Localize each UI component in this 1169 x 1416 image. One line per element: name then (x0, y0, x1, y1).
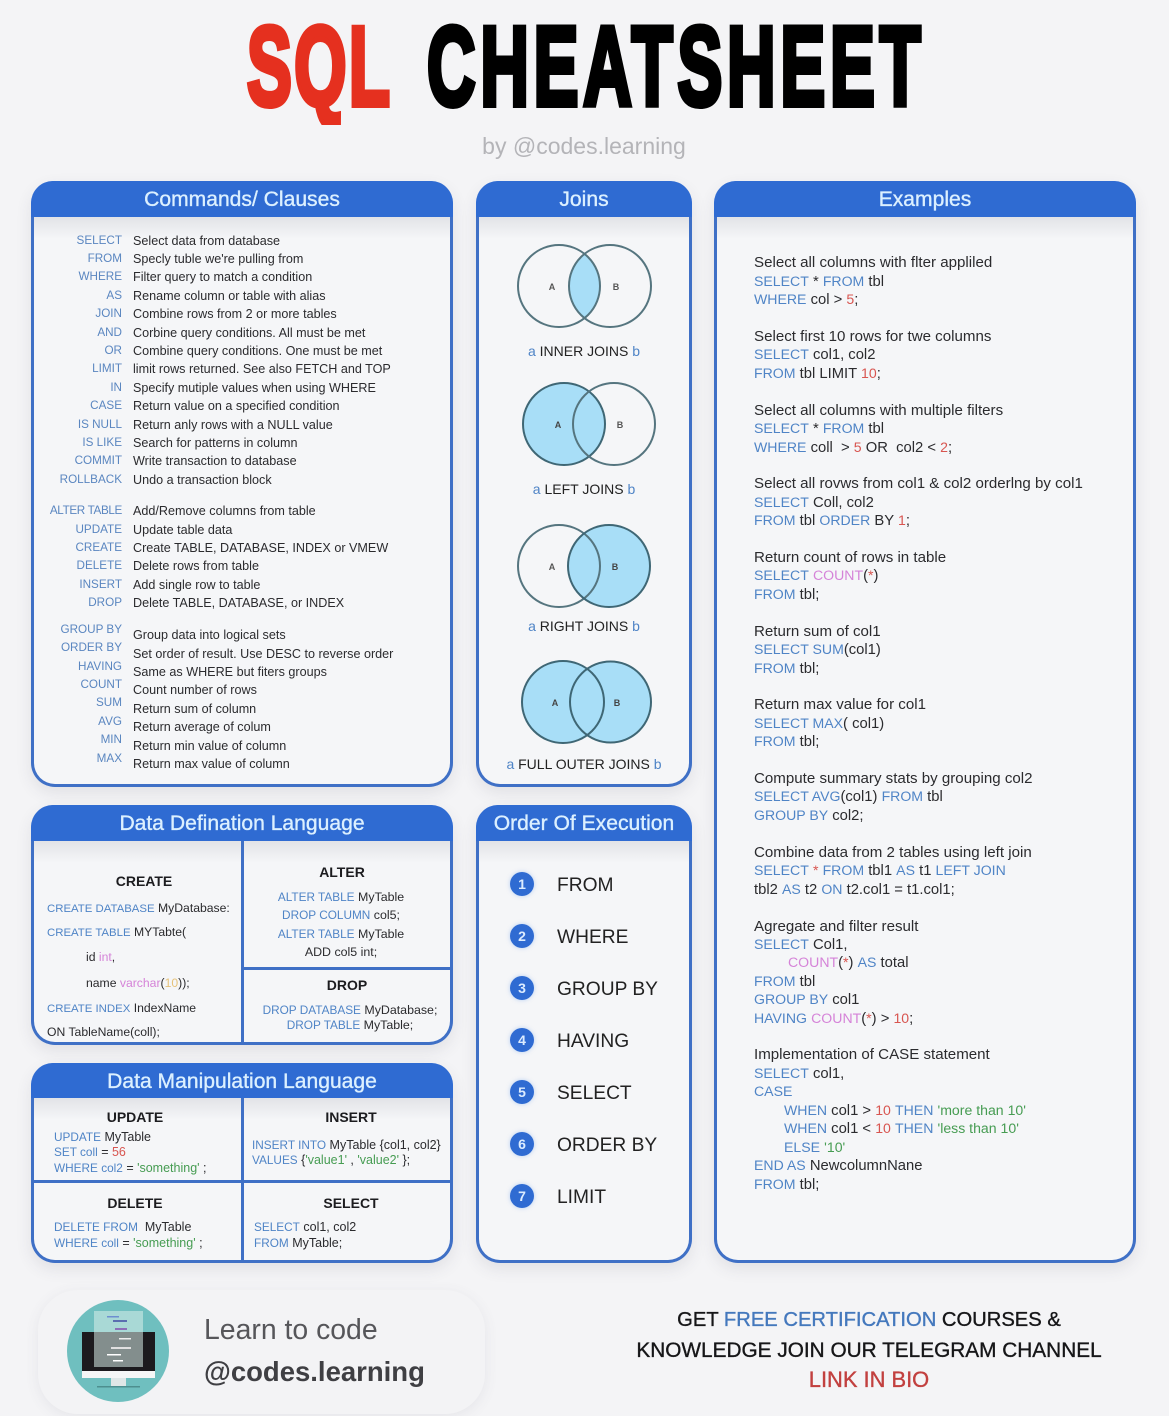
step 6 (508, 1130, 657, 1158)
text block: command list: Rename column or table with alias (133, 289, 326, 303)
text block: command list: IN (110, 381, 122, 394)
heading: joins: Joins (559, 188, 609, 211)
text block: drop statements (263, 1003, 437, 1032)
text block: command list: Combine rows from 2 or more tables (133, 307, 337, 321)
heading: joins (476, 181, 692, 217)
text block: command list: Add/Remove columns from table (133, 504, 316, 518)
step 4 (508, 1026, 629, 1054)
venn: full outer join (521, 660, 652, 744)
text block: command list: IS NULL (78, 418, 122, 430)
text block: command list: Combine query conditions. One must be met (133, 344, 382, 358)
text block: command list: Delete TABLE, DATABASE, or INDEX (133, 596, 344, 610)
text block: delete statement: DELETE FROM MyTable (54, 1220, 191, 1234)
text block: create statements: CREATE TABLE MYTabte( (47, 925, 186, 939)
text block: command list: DROP (88, 596, 122, 609)
text block: query examples: SELECT * FROM tbl (754, 273, 884, 290)
call to action: KNOWLEDGE JOIN OUR TELEGRAM CHANNEL (636, 1338, 1102, 1362)
step 7 (508, 1182, 606, 1210)
text block: alter statements: ADD col5 int; (305, 945, 377, 959)
text block: update statement: WHERE col2 = 'something' ; (54, 1161, 206, 1175)
text block: command list: ALTER TABLE (50, 504, 122, 517)
text block: command list: Return average of colum (133, 720, 271, 734)
text block: query examples: GROUP BY col2; (754, 807, 864, 824)
venn: full outer join: A (552, 698, 559, 708)
step 5: 5 (518, 1084, 526, 1100)
heading: data manipulation language (31, 1063, 453, 1098)
step 1 (508, 870, 614, 898)
heading: insert: INSERT (325, 1109, 377, 1125)
text block: command list: Return max value of column (133, 757, 290, 771)
heading: create: CREATE (116, 873, 172, 889)
text block: command list: AS (106, 289, 122, 302)
text block: query examples: tbl2 AS t2 ON t2.col1 = t1.col1; (754, 881, 955, 898)
step 5: SELECT (557, 1083, 632, 1104)
text block: command list: Create TABLE, DATABASE, INDEX or VMEW (133, 541, 388, 555)
text block: command list: SUM (96, 696, 122, 709)
heading: data manipulation language: Data Manipulation Language (107, 1070, 377, 1093)
text block: command list: ORDER BY (61, 641, 122, 654)
venn: right join: B (612, 562, 619, 572)
text block: query examples: FROM tbl; (754, 733, 819, 750)
text block: select statement (254, 1220, 356, 1250)
text block: query examples: FROM tbl LIMIT 10; (754, 365, 881, 382)
byline: by @codes.learning (482, 133, 686, 159)
text block: query examples: END AS NewcolumnNane (754, 1157, 922, 1174)
step 6: 6 (518, 1136, 526, 1152)
text block: command list: SELECT (77, 234, 122, 246)
text block: create statements: ON TableName(coll); (47, 1025, 160, 1039)
text block: command list (50, 234, 394, 771)
text block: query examples: SELECT AVG(col1) FROM tbl (754, 788, 943, 805)
text block: command list: LIMIT (92, 362, 122, 375)
label: left join: a LEFT JOINS b (533, 481, 635, 497)
text block: query examples: SELECT * FROM tbl1 AS t1 LEFT JOIN (754, 862, 1006, 879)
heading: delete: DELETE (107, 1195, 163, 1211)
text block: insert statement: INSERT INTO MyTable {col1, col2} (252, 1138, 441, 1152)
text block: select statement: FROM MyTable; (254, 1236, 342, 1250)
text block: query examples: SELECT Col1, (754, 936, 847, 953)
text block: query examples: SELECT Coll, col2 (754, 494, 874, 511)
text block: command list: ROLLBACK (60, 473, 122, 486)
text block: query examples: FROM tbl ORDER BY 1; (754, 512, 910, 529)
text block: command list: MIN (101, 733, 122, 746)
text block: query examples: Select first 10 rows for twe columns (754, 328, 991, 345)
text block: command list: WHERE (78, 270, 122, 283)
text block: command list: Write transaction to database (133, 454, 297, 468)
text block: command list: Update table data (133, 522, 232, 536)
text: learn to code: Learn to code (204, 1314, 378, 1346)
text block: command list: CREATE (75, 541, 122, 554)
text block: query examples: SELECT col1, (754, 1065, 844, 1082)
step 7: LIMIT (557, 1187, 606, 1208)
text block: alter statements: ALTER TABLE MyTable (278, 927, 404, 941)
text block: query examples: GROUP BY col1 (754, 991, 859, 1008)
step 7: 7 (518, 1188, 526, 1204)
text: handle: @codes.learning (204, 1356, 425, 1387)
text block: command list: AND (97, 326, 122, 338)
step 3: GROUP BY (557, 979, 658, 1000)
text block: command list: OR (104, 344, 122, 357)
text block: command list: Select data from database (133, 234, 280, 248)
text block: query examples: WHEN col1 < 10 THEN 'less than 10' (784, 1120, 1019, 1137)
text block: command list: Specly tuble we're pulling from (133, 252, 303, 266)
text block: delete statement: WHERE coll = 'something' ; (54, 1236, 203, 1250)
panel: joins (476, 181, 692, 787)
text block: query examples: Select all rovws from col1 & col2 orderlng by col1 (754, 475, 1083, 492)
heading: data defination language (31, 805, 453, 841)
text block: query examples: Implementation of CASE statement (754, 1046, 990, 1063)
call to action (636, 1309, 1102, 1392)
text block: query examples: FROM tbl (754, 973, 815, 990)
text block: drop statements: DROP TABLE MyTable; (287, 1018, 413, 1032)
step 4: HAVING (557, 1031, 629, 1052)
text block: select statement: SELECT col1, col2 (254, 1220, 356, 1234)
heading: data defination language: Data Defination Language (119, 812, 365, 835)
text block: insert statement (252, 1138, 441, 1167)
venn: left join: A (555, 420, 562, 430)
call to action: GET FREE CERTIFICATION COURSES & (677, 1309, 1061, 1331)
text block: command list: Specify mutiple values when using WHERE (133, 381, 376, 395)
text block: query examples: COUNT(*) AS total (788, 954, 908, 971)
text block: command list: limit rows returned. See also FETCH and TOP (133, 362, 391, 376)
text block: command list: INSERT (79, 578, 122, 591)
text block: query examples: ELSE '10' (784, 1139, 845, 1155)
heading: examples: Examples (879, 188, 971, 211)
text block: command list: Set order of result. Use DESC to reverse order (133, 646, 393, 660)
label: inner join: a INNER JOINS b (528, 343, 640, 359)
text block: query examples: FROM tbl; (754, 1176, 819, 1193)
venn: inner join (517, 244, 652, 328)
heading: drop: DROP (327, 977, 367, 993)
heading: commands: Commands/ Clauses (144, 188, 340, 211)
text block: query examples: WHEN col1 > 10 THEN 'more than 10' (784, 1102, 1026, 1119)
text block: query examples: SELECT COUNT(*) (754, 567, 878, 584)
heading: select: SELECT (323, 1195, 379, 1211)
heading: update: UPDATE (107, 1109, 163, 1125)
text block: query examples: Select all columns with multiple filters (754, 402, 1003, 419)
text block: query examples: SELECT SUM(col1) (754, 641, 881, 658)
text block: insert statement: VALUES {'value1' , 'value2' }; (252, 1153, 410, 1167)
text block: command list: FROM (88, 252, 122, 265)
text block: query examples: SELECT col1, col2 (754, 346, 875, 363)
step 2 (508, 922, 628, 950)
text block: alter statements (278, 890, 404, 959)
panel: data definition language (31, 805, 453, 1045)
text block: command list: Group data into logical sets (133, 628, 286, 642)
text block: update statement: UPDATE MyTable (54, 1130, 151, 1144)
text block: command list: COMMIT (75, 454, 122, 467)
text block: command list: MAX (97, 752, 122, 764)
panel: commands and clauses (31, 181, 453, 787)
step 3 (508, 974, 658, 1002)
label: right join: a RIGHT JOINS b (528, 618, 640, 634)
text block: alter statements: DROP COLUMN col5; (282, 908, 400, 922)
text block: query examples: Return count of rows in table (754, 549, 946, 566)
text block: query examples: SELECT MAX( col1) (754, 715, 884, 732)
text block: query examples (754, 254, 1083, 1193)
text block: query examples: Agregate and filter result (754, 918, 918, 935)
text block: create statements: name varchar(10)); (86, 976, 190, 990)
text block: command list: DELETE (77, 559, 122, 572)
venn: left join: B (617, 420, 624, 430)
text block: command list: Add single row to table (133, 578, 260, 592)
text block: query examples: WHERE coll > 5 OR col2 < 2; (754, 439, 952, 456)
text block: query examples: FROM tbl; (754, 660, 819, 677)
venn: full outer join: B (614, 698, 621, 708)
text block: command list: GROUP BY (60, 622, 122, 636)
panel: data manipulation language (31, 1063, 453, 1263)
text block: update statement: SET coll = 56 (54, 1145, 126, 1159)
step 2: 2 (518, 928, 526, 944)
text block: update statement (54, 1130, 206, 1175)
text block: command list: Same as WHERE but fiters groups (133, 665, 327, 679)
venn: inner join: A (549, 282, 556, 292)
text block: query examples: Compute summary stats by grouping col2 (754, 770, 1033, 787)
step 6: ORDER BY (557, 1135, 657, 1156)
text block: alter statements: ALTER TABLE MyTable (278, 890, 404, 904)
text block: create statements: CREATE DATABASE MyDatabase: (47, 901, 230, 915)
step 5 (508, 1078, 632, 1106)
text block: command list: Return min value of column (133, 739, 286, 753)
text block: command list: Return sum of column (133, 702, 256, 716)
text block: command list: IS LIKE (82, 436, 122, 449)
text block: drop statements: DROP DATABASE MyDatabase; (263, 1003, 437, 1017)
venn: right join: A (549, 562, 556, 572)
text block: query examples: Combine data from 2 tables using left join (754, 844, 1032, 861)
heading: alter: ALTER (319, 864, 365, 880)
footer badge (38, 1290, 485, 1414)
panel: order of execution (476, 805, 692, 1263)
text block: query examples: SELECT * FROM tbl (754, 420, 884, 437)
text block: query examples: Return max value for col1 (754, 696, 926, 713)
venn: inner join: B (613, 282, 620, 292)
panel: examples (714, 181, 1136, 1263)
step 1: FROM (557, 875, 614, 896)
venn: right join (517, 524, 651, 608)
venn: left join (522, 382, 656, 466)
text block: command list: Filter query to match a condition (133, 270, 312, 284)
call to action: LINK IN BIO (809, 1367, 929, 1392)
text block: command list: Return anly rows with a NULL value (133, 418, 333, 432)
text block: create statements: id int, (86, 950, 115, 964)
text block: query examples: CASE (754, 1083, 792, 1099)
text block: command list: Corbine query conditions. All must be met (133, 326, 365, 340)
text block: command list: COUNT (80, 678, 122, 691)
text block: query examples: FROM tbl; (754, 586, 819, 603)
step 1: 1 (518, 876, 526, 892)
heading: commands (31, 181, 453, 217)
text block: create statements (47, 901, 230, 1039)
text block: command list: Count number of rows (133, 683, 257, 697)
text block: command list: Return value on a specified condition (133, 399, 340, 413)
text block: create statements: CREATE INDEX IndexName (47, 1001, 196, 1015)
text block: command list: AVG (98, 715, 122, 728)
heading: examples (714, 181, 1136, 217)
text block: query examples: WHERE col > 5; (754, 291, 858, 308)
text block: query examples: HAVING COUNT(*) > 10; (754, 1010, 913, 1027)
text block: delete statement (54, 1220, 203, 1250)
step 2: WHERE (557, 927, 628, 948)
step 4: 4 (518, 1032, 526, 1048)
text block: command list: CASE (90, 399, 122, 412)
text block: command list: Search for patterns in column (133, 436, 298, 450)
text block: command list: Undo a transaction block (133, 473, 272, 487)
text block: command list: HAVING (78, 660, 122, 672)
text block: query examples: Select all columns with flter appliled (754, 254, 992, 271)
text block: command list: Delete rows from table (133, 559, 259, 573)
heading: order of execution: Order Of Execution (494, 812, 674, 835)
label: full outer join: a FULL OUTER JOINS b (506, 756, 662, 772)
icon: monitor with code (67, 1300, 169, 1402)
heading: order of execution (476, 805, 692, 841)
text block: command list: JOIN (95, 307, 122, 320)
text block: query examples: Return sum of col1 (754, 623, 881, 640)
step 3: 3 (518, 980, 526, 996)
text block: command list: UPDATE (75, 522, 122, 536)
